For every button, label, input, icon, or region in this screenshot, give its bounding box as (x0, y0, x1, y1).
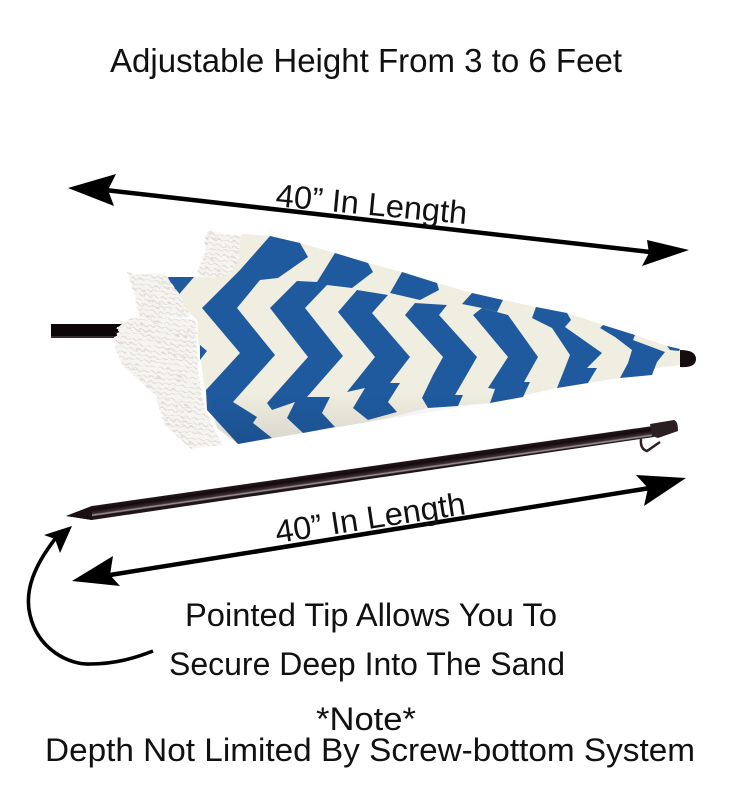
arrow: curved arrow to tip (28, 526, 153, 664)
icon: pole handle (51, 324, 123, 338)
text: note (45, 701, 695, 768)
text: pointed tip caption: Secure Deep Into The Sand (169, 646, 565, 682)
icon: chevron umbrella (114, 231, 696, 448)
text: note: Depth Not Limited By Screw-bottom System (45, 732, 695, 768)
text: note: *Note* (316, 701, 416, 737)
label: top length: 40” In Length (274, 177, 469, 231)
text: pointed tip caption: Pointed Tip Allows You To (185, 597, 557, 633)
icon: pole with pointed tip (66, 420, 678, 520)
arrow: top length arrow (68, 174, 689, 266)
fringe: front (114, 316, 222, 448)
title: Adjustable Height From 3 to 6 Feet (110, 42, 622, 79)
text: pointed tip caption (169, 597, 565, 682)
label: lower length: 40” In Length (273, 485, 468, 550)
blue chevron stripes (168, 236, 680, 444)
canopy shading (168, 234, 682, 444)
arrow: lower length arrow (72, 475, 686, 586)
umbrella canopy base (168, 234, 682, 444)
umbrella tip cap (680, 350, 696, 367)
fringe: middle (128, 273, 190, 318)
fringe: top (197, 231, 242, 277)
